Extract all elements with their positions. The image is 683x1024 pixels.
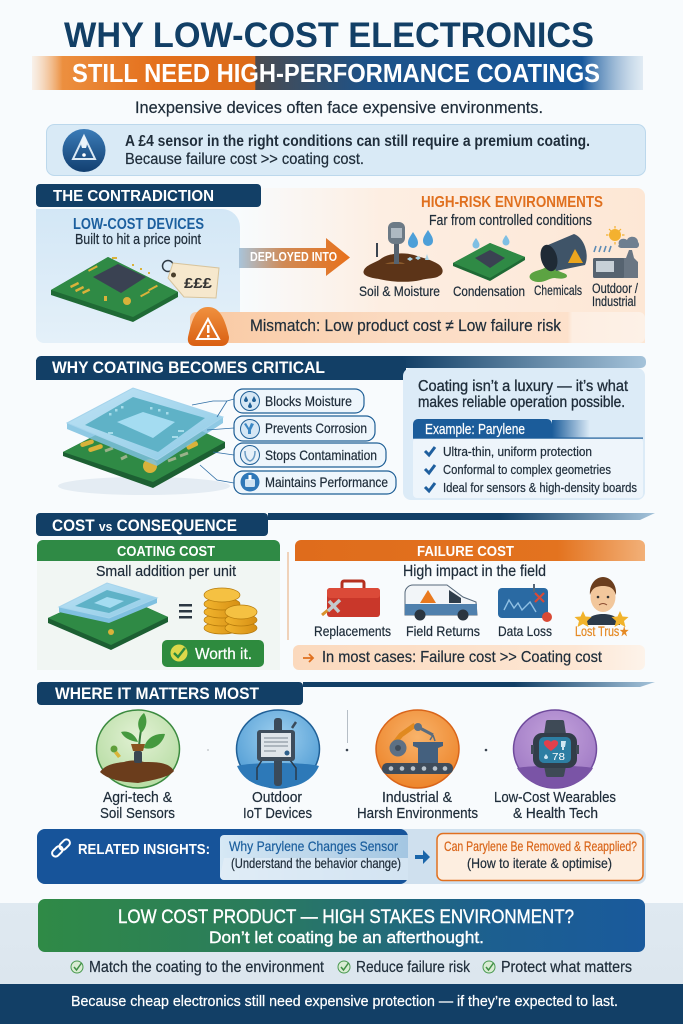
benefit: stops contamination (234, 443, 386, 467)
icon: link (51, 838, 71, 858)
badge: worth it (162, 640, 264, 667)
example list (413, 419, 643, 498)
checklist: Protect what matters (501, 959, 632, 976)
divider (288, 552, 289, 640)
link card: removed and reapplied (437, 834, 643, 880)
statement: makes reliable operation possible. (418, 394, 625, 411)
footer: Because cheap electronics still need expensive protection — if they’re expected to last. (71, 993, 618, 1010)
call to action banner: LOW COST PRODUCT — HIGH STAKES ENVIRONMENT? (118, 906, 574, 928)
link card: parylene changes sensor (220, 835, 408, 880)
icon: toolbox (322, 581, 380, 617)
label: replacements: Replacements (314, 623, 391, 639)
illustration: coated board (48, 583, 168, 650)
illustration: coated circuit board (58, 388, 230, 495)
call to action banner (38, 899, 645, 952)
link card: parylene changes sensor: Why Parylene Changes Sensor (229, 838, 398, 854)
callout: failure cost comparison: In most cases: Failure cost >> Coating cost (322, 649, 602, 666)
link card: parylene changes sensor: (Understand the behavior change) (231, 855, 401, 871)
badge: worth it: Worth it. (195, 646, 252, 663)
panel: coating statement and parylene example (403, 368, 645, 500)
label: data loss: Data Loss (498, 623, 552, 639)
panel: the contradiction (36, 184, 645, 346)
label: soil: Soil & Moisture (359, 283, 440, 299)
callout text (125, 133, 590, 168)
call to action band (0, 899, 683, 985)
label: chemicals: Chemicals (534, 282, 582, 298)
icon: warning badge (62, 129, 106, 172)
high-risk heading: Far from controlled conditions (429, 212, 592, 229)
example list: Conformal to complex geometries (443, 462, 611, 477)
callout text: A £4 sensor in the right conditions can still require a premium coating. (125, 133, 590, 150)
label: outdoor industrial (592, 281, 638, 309)
panel: coating cost (37, 540, 280, 670)
panel: failure cost (293, 540, 645, 670)
benefit: prevents corrosion (234, 416, 375, 441)
panel: why coating becomes critical (36, 356, 646, 500)
footer (0, 984, 683, 1024)
high-risk heading: HIGH-RISK ENVIRONMENTS (421, 194, 603, 211)
label: outdoor IoT: IoT Devices (243, 805, 312, 822)
panel: low-cost devices: LOW-COST DEVICES (73, 216, 204, 233)
callout: mismatch (188, 307, 645, 346)
panel: low-cost devices (36, 209, 240, 343)
heading: why coating becomes critical: WHY COATING BECOMES CRITICAL (52, 359, 325, 377)
icon: chemicals (530, 234, 587, 282)
label: agri-tech: Agri-tech & (103, 789, 172, 806)
example list: Ideal for sensors & high-density boards (443, 480, 637, 495)
label: field returns: Field Returns (406, 623, 480, 639)
label: wearables: & Health Tech (513, 805, 598, 822)
label: industrial (357, 789, 478, 822)
label: outdoor IoT (243, 789, 312, 822)
title: WHY LOW-COST ELECTRONICS (64, 16, 594, 55)
heading: where it matters most (37, 682, 655, 705)
label: related insights: RELATED INSIGHTS: (78, 841, 210, 858)
icon: gold coins (204, 588, 257, 634)
call to action banner: Don’t let coating be an afterthought. (209, 928, 484, 947)
benefit: blocks moisture: Blocks Moisture (265, 393, 352, 409)
icon: data loss (498, 584, 552, 622)
callout: failure cost comparison (293, 645, 645, 670)
panel: coating cost: Small addition per unit (96, 563, 237, 580)
panel: high-risk background (240, 188, 645, 343)
label: wearables: Low-Cost Wearables (494, 789, 616, 806)
checklist (71, 959, 632, 976)
panel: low-cost devices: Built to hit a price point (75, 231, 202, 248)
icon: warning (188, 307, 229, 346)
label: outdoor IoT: Outdoor (252, 789, 302, 806)
callout text: Because failure cost >> coating cost. (125, 151, 364, 168)
icon: condensation (453, 235, 525, 281)
checklist: Match the coating to the environment (89, 959, 325, 976)
statement: Coating isn’t a luxury — it’s what (418, 378, 628, 395)
panel: related insights (37, 829, 646, 884)
icon: price tag: £££ (184, 275, 213, 292)
arrow: deployed into (239, 238, 350, 276)
callout: mismatch: Mismatch: Low product cost ≠ Low failure risk (250, 316, 561, 335)
application: industrial (376, 710, 459, 788)
icon: van (405, 585, 477, 620)
label: lost trust: Lost Trus★ (575, 624, 629, 639)
equals sign (179, 604, 192, 618)
label: outdoor industrial: Industrial (592, 294, 636, 309)
title banner: STILL NEED HIGH-PERFORMANCE COATINGS (72, 58, 600, 88)
link card: removed and reapplied: (How to iterate & optimise) (467, 855, 612, 871)
benefit: maintains performance: Maintains Performance (265, 474, 388, 490)
application: wearables: 78 (552, 752, 566, 763)
small separators (207, 710, 487, 751)
heading: where it matters most: WHERE IT MATTERS MOST (55, 685, 259, 703)
example list: Example: Parylene (425, 421, 525, 438)
panel: coating cost: COATING COST (117, 543, 215, 560)
connector lines (192, 399, 234, 483)
label: condensation: Condensation (453, 283, 525, 299)
panel: cost vs consequence (36, 513, 655, 670)
subtitle: Inexpensive devices often face expensive environments. (135, 99, 543, 117)
benefit: blocks moisture (234, 389, 364, 413)
statement (418, 378, 628, 411)
panel: failure cost: High impact in the field (403, 563, 546, 580)
checklist: Reduce failure risk (356, 959, 470, 976)
application: agri-tech (96, 710, 180, 788)
heading: the contradiction (36, 184, 261, 207)
icon: price tag (162, 260, 219, 298)
heading: cost vs consequence (36, 513, 655, 536)
heading: why coating becomes critical (36, 356, 646, 380)
application: wearables (514, 710, 596, 788)
label: agri-tech (100, 789, 175, 822)
label: industrial: Harsh Environments (357, 805, 478, 822)
panel: failure cost: FAILURE COST (417, 543, 514, 560)
callout: premium coating (46, 124, 646, 176)
example list: Ultra-thin, uniform protection (443, 444, 592, 459)
label: outdoor industrial: Outdoor / (592, 281, 638, 296)
benefit: stops contamination: Stops Contamination (265, 447, 377, 463)
benefit: maintains performance (234, 471, 396, 494)
panel: where it matters most (37, 682, 655, 822)
label: wearables (494, 789, 616, 822)
application: outdoor IoT (236, 710, 320, 788)
benefit: prevents corrosion: Prevents Corrosion (265, 420, 367, 436)
icon: soil and moisture (363, 222, 443, 282)
icon: outdoor industrial (593, 226, 639, 278)
heading: the contradiction: THE CONTRADICTION (53, 188, 214, 205)
icon: unhappy person with stars (574, 577, 628, 627)
arrow: to next insight (415, 850, 430, 864)
high-risk heading (421, 194, 603, 229)
heading: cost vs consequence: COST vs CONSEQUENCE (52, 517, 237, 535)
arrow: deployed into: DEPLOYED INTO (250, 250, 337, 264)
icon: circuit board (51, 257, 178, 322)
label: agri-tech: Soil Sensors (100, 805, 175, 822)
label: industrial: Industrial & (382, 789, 452, 806)
